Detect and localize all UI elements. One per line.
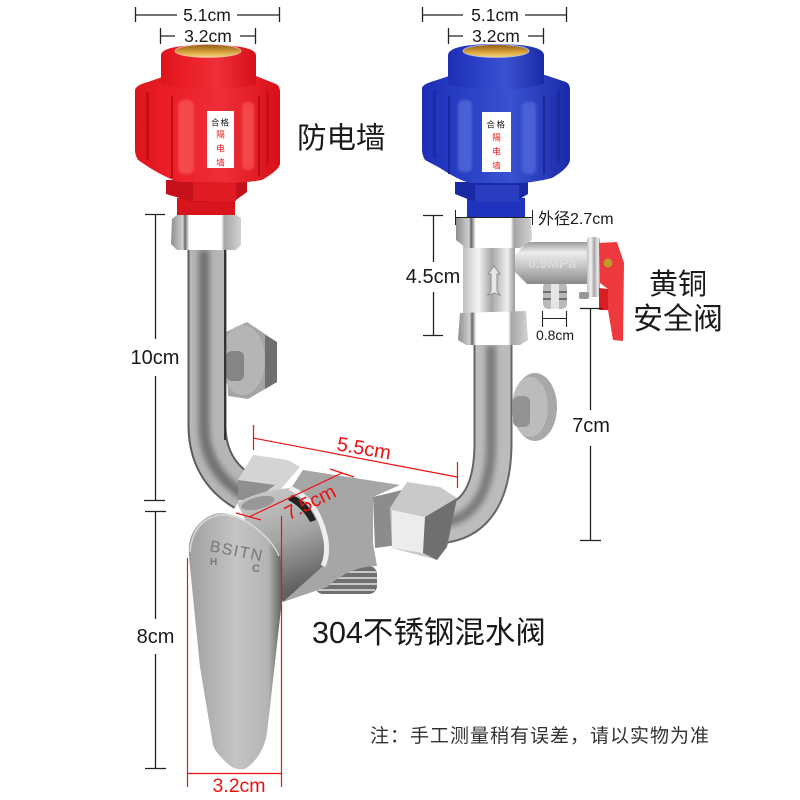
label on blue knob: 合格 bbox=[486, 120, 507, 130]
valve side flange bbox=[579, 237, 600, 299]
label on blue knob: 墙 bbox=[492, 160, 501, 170]
lever handle bbox=[189, 513, 282, 769]
handle cylinder bbox=[237, 488, 327, 602]
footnote: 注：手工测量稍有误差，请以实物为准 bbox=[370, 725, 710, 747]
valve main body bbox=[463, 245, 515, 313]
red insulation wall fitting bbox=[135, 44, 280, 250]
0.8cm dimension: 0.8cm bbox=[536, 327, 574, 343]
10cm dimension bbox=[131, 214, 179, 500]
red 3.2cm handle width dimension: 3.2cm bbox=[212, 775, 266, 797]
label on red knob: 墙 bbox=[216, 158, 225, 168]
label on red knob: 合格 bbox=[211, 118, 230, 128]
8cm dimension: 8cm bbox=[137, 626, 174, 648]
casting body bbox=[270, 470, 400, 602]
brass opening, red bbox=[175, 44, 241, 58]
top right 5.1cm dimension: 5.1cm bbox=[471, 5, 519, 25]
red top cylinder bbox=[161, 45, 256, 90]
label on blue knob: 电 bbox=[492, 146, 501, 156]
blue insulation wall fitting bbox=[422, 44, 570, 218]
blue neck and collar bbox=[455, 182, 528, 218]
mixer valve bbox=[189, 455, 457, 769]
brand text: H bbox=[210, 557, 217, 568]
brass safety valve bbox=[456, 217, 624, 345]
rear hex fitting, left bbox=[221, 322, 277, 399]
red lever handle bbox=[599, 242, 624, 341]
label: 304 stainless mixer valve: 304不锈钢混水阀 bbox=[312, 616, 546, 650]
4.5cm dimension: 4.5cm bbox=[406, 266, 460, 288]
brand text: BSITN bbox=[208, 538, 265, 565]
outer diameter 2.7cm dimension: 外径2.7cm bbox=[538, 210, 614, 228]
top left 3.2cm dimension bbox=[160, 26, 256, 46]
top right 5.1cm dimension bbox=[422, 5, 566, 25]
label: anti-electric wall: 防电墙 bbox=[297, 122, 386, 155]
brass opening, blue bbox=[463, 44, 529, 58]
valve top nut bbox=[456, 217, 532, 248]
brass safety valve: 0.9MPa bbox=[528, 255, 576, 271]
label: brass safety valve bbox=[633, 268, 723, 336]
right hex nut bbox=[390, 482, 457, 560]
right stainless pipe bbox=[434, 345, 557, 525]
top right 3.2cm dimension bbox=[448, 26, 544, 46]
red 7.5cm dimension: 7.5cm bbox=[281, 481, 340, 525]
red neck and collar bbox=[166, 180, 247, 216]
blue top cylinder bbox=[448, 44, 544, 90]
7cm dimension bbox=[572, 308, 610, 540]
label: brass safety valve: 黄铜 bbox=[649, 268, 707, 301]
red 3.2cm handle width dimension bbox=[187, 516, 282, 797]
label on blue knob: 隔 bbox=[492, 132, 501, 142]
4.5cm dimension bbox=[406, 215, 460, 336]
brand text: C bbox=[252, 563, 260, 575]
7cm dimension: 7cm bbox=[572, 415, 610, 437]
left stainless pipe bbox=[204, 250, 277, 495]
label on red knob bbox=[207, 111, 234, 168]
red 5.5cm dimension: 5.5cm bbox=[335, 433, 393, 465]
top left 5.1cm dimension bbox=[135, 5, 280, 25]
valve drain nozzle bbox=[543, 282, 567, 309]
threaded outlet bbox=[315, 566, 377, 594]
top right 3.2cm dimension: 3.2cm bbox=[472, 26, 520, 46]
left hex nut bbox=[238, 455, 300, 500]
rear round fitting, right bbox=[512, 373, 557, 441]
valve arrow mark bbox=[488, 266, 500, 295]
0.8cm dimension bbox=[536, 311, 574, 343]
valve bottom nut bbox=[458, 311, 528, 345]
label on red knob: 隔 bbox=[216, 130, 225, 140]
valve side arm bbox=[515, 242, 588, 284]
label on blue knob bbox=[482, 112, 511, 172]
red 7.5cm dimension bbox=[236, 469, 354, 525]
blue knob bbox=[422, 75, 570, 183]
top left 3.2cm dimension: 3.2cm bbox=[184, 26, 232, 46]
label: brass safety valve: 安全阀 bbox=[633, 303, 723, 336]
top left 5.1cm dimension: 5.1cm bbox=[183, 5, 231, 25]
8cm dimension bbox=[137, 511, 174, 768]
red knob bbox=[135, 76, 280, 183]
10cm dimension: 10cm bbox=[131, 347, 179, 369]
outer diameter 2.7cm dimension bbox=[455, 210, 614, 228]
label on red knob: 电 bbox=[216, 144, 225, 154]
red 5.5cm dimension bbox=[253, 425, 458, 488]
left chrome nut bbox=[171, 215, 241, 250]
